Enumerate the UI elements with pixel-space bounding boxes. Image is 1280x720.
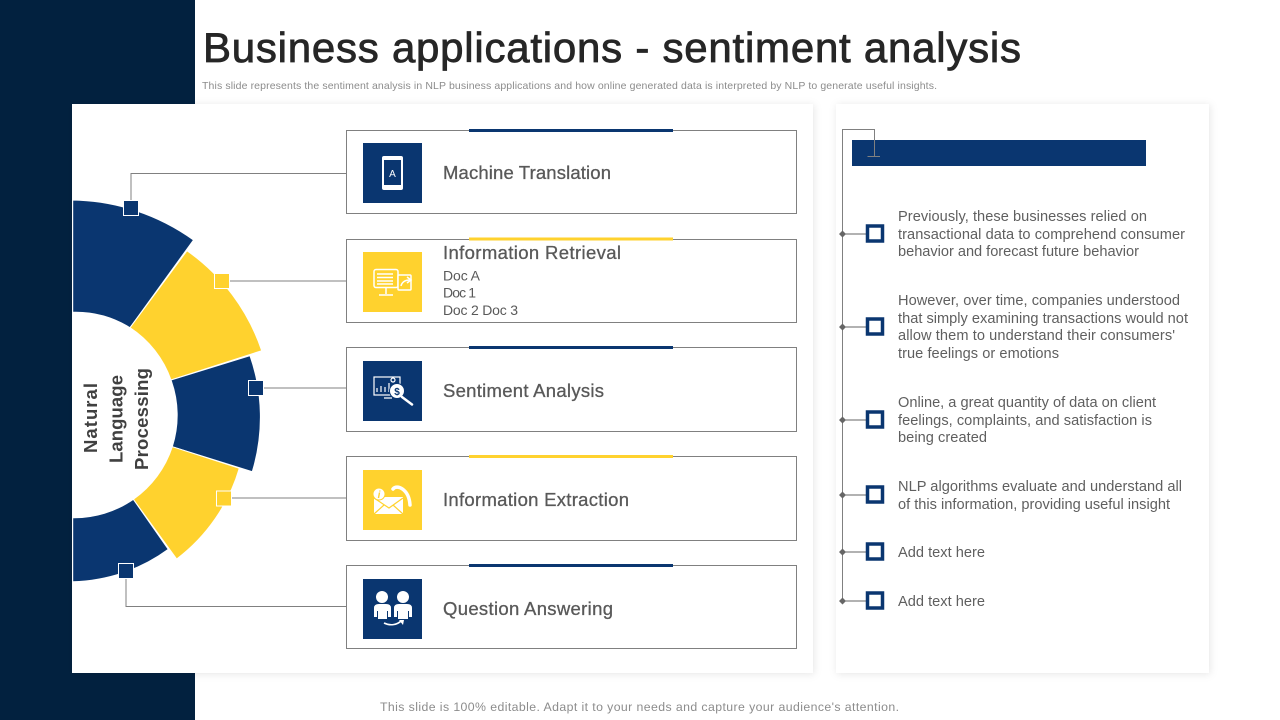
label: Machine Translation (443, 162, 611, 183)
label with documents: Doc A (443, 268, 481, 284)
text: point 4: NLP algorithms evaluate and understand all (898, 479, 1182, 495)
text: point 1: transactional data to comprehend consumer (898, 227, 1185, 243)
text: point 3: Online, a great quantity of data on client (898, 395, 1156, 411)
bullet squares (868, 226, 882, 608)
label: Information Extraction (443, 489, 629, 510)
footer note: This slide is 100% editable. Adapt it to your needs and capture your audience's attention. (380, 700, 899, 714)
label with documents (443, 242, 621, 318)
center label: Language (106, 375, 126, 463)
text: point 2: However, over time, companies understood (898, 293, 1180, 309)
text: point 4: of this information, providing useful insight (898, 497, 1170, 513)
center label: Natural (80, 383, 101, 453)
text: point 3 (898, 395, 1156, 446)
text: point 2 (898, 293, 1188, 362)
icon: mail and phone (363, 470, 422, 530)
text: point 5: Add text here (898, 545, 985, 561)
title: Business applications - sentiment analysis (203, 24, 1021, 71)
card: sentiment analysis (346, 346, 796, 432)
text: point 3: feelings, complaints, and satisfaction is (898, 413, 1152, 429)
card: machine translation (346, 129, 796, 214)
header bar (852, 140, 1146, 166)
subtitle: This slide represents the sentiment analysis in NLP business applications and how online generated data is interpreted by NLP to generate useful insights. (202, 80, 937, 92)
text: point 1: Previously, these businesses relied on (898, 209, 1147, 225)
icon: chart magnifier: $ (394, 387, 400, 398)
icon: phone (363, 143, 422, 203)
card: information extraction (346, 455, 796, 540)
panel: right (836, 104, 1209, 673)
donut: natural language processing (73, 200, 262, 582)
text: point 4 (898, 479, 1182, 513)
center label: Processing (131, 368, 152, 470)
timeline connector (839, 130, 880, 604)
sidebar (0, 0, 195, 720)
icon: phone: A (389, 169, 396, 180)
label with documents: Doc 2 Doc 3 (443, 302, 518, 318)
center label (80, 368, 152, 470)
label: Sentiment Analysis (443, 380, 604, 401)
text: point 3: being created (898, 430, 987, 446)
node markers (118, 200, 264, 578)
icon: chart magnifier (363, 361, 422, 421)
text: point 1: behavior and forecast future behavior (898, 244, 1139, 260)
panel: left (72, 104, 813, 673)
segment 5 (73, 499, 168, 582)
connector lines (126, 174, 347, 606)
icon: two people (363, 579, 422, 639)
text: point 6: Add text here (898, 594, 985, 610)
text: point 1 (898, 209, 1185, 260)
segment 3 (171, 356, 260, 472)
card: question answering (346, 564, 796, 648)
text: point 2: that simply examining transactions would not (898, 311, 1188, 327)
card: information retrieval (346, 238, 796, 322)
label with documents: Information Retrieval (443, 242, 621, 263)
segment 4 (133, 447, 239, 559)
text: point 2: true feelings or emotions (898, 346, 1059, 362)
segment 2 (130, 251, 262, 380)
label with documents: Doc 1 (443, 284, 476, 300)
label: Question Answering (443, 598, 613, 619)
icon: monitor share (363, 252, 422, 312)
icon: mail and phone: i (378, 490, 381, 501)
text: point 2: allow them to understand their consumers' (898, 328, 1175, 344)
segment 1 (73, 200, 194, 328)
